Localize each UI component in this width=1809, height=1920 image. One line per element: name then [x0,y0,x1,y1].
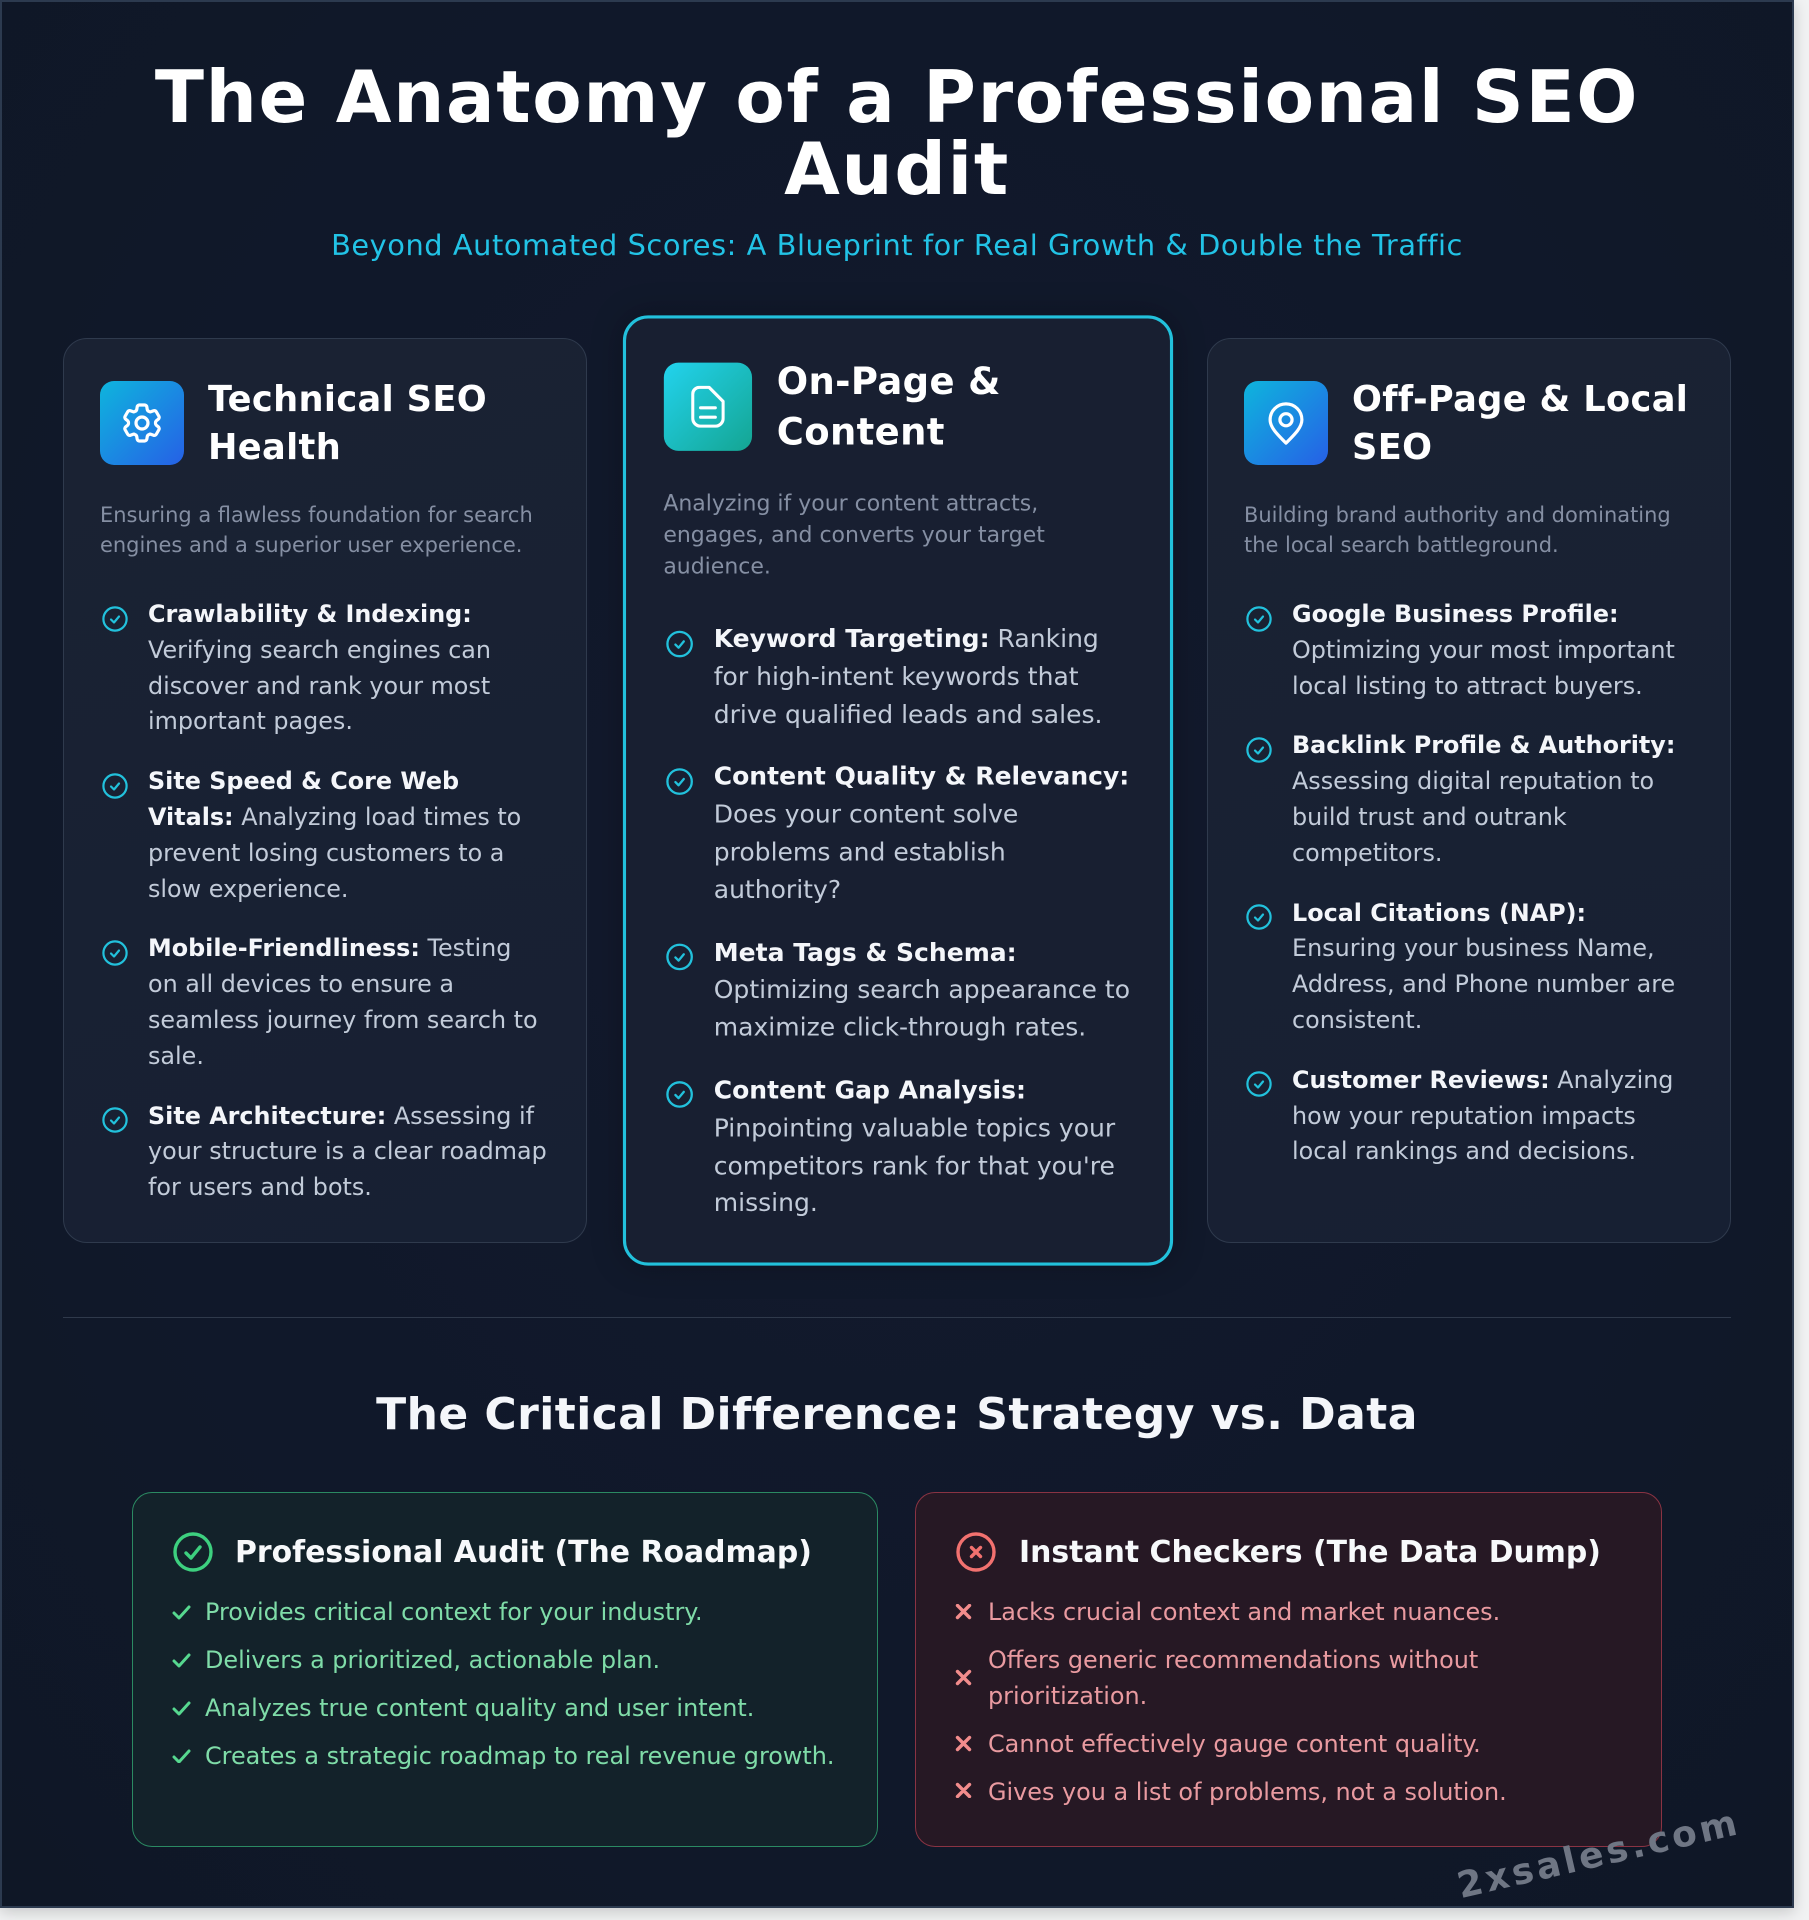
item: backlink profile: Backlink Profile & Authority: [1292,731,1675,759]
card heading: off-page [1244,379,1688,468]
item: mobile friendliness: seamless journey from search to [148,1006,538,1034]
item: site speed [102,767,521,903]
item: meta tags: Optimizing search appearance to [713,975,1130,1005]
item: crawlability [102,600,491,735]
item: crawlability: discover and rank your most [148,672,490,700]
description: Ensuring a flawless foundation for search [100,502,533,526]
item: site architecture [102,1102,547,1201]
description: audience. [663,553,770,578]
item: content gap: competitors rank for that you're [713,1151,1114,1180]
description: engines and a superior user experience. [100,532,522,556]
heading: instant checkers: Instant Checkers (The Data Dump) [1019,1535,1601,1570]
item: local citations: consistent. [1292,1006,1422,1034]
item: customer reviews: local rankings and decisions. [1292,1137,1636,1165]
icon: map pin [1244,381,1328,465]
list item: prioritization. [988,1682,1147,1710]
item: backlink profile [1246,731,1675,867]
item: keyword targeting: Keyword Targeting: Ranking [713,624,1098,653]
item: content quality: Content Quality & Relevancy: [713,762,1129,791]
list item: Creates a strategic roadmap to real revenue growth. [205,1742,834,1770]
icons: check marks [172,1605,191,1763]
item: keyword targeting [666,624,1102,729]
heading: professional audit: Professional Audit (The Roadmap) [235,1535,812,1570]
heading text [208,379,487,468]
item: meta tags: maximize click-through rates. [713,1013,1086,1042]
item: content quality [666,762,1129,904]
item: backlink profile: build trust and outrank [1292,803,1567,831]
item: content gap: Pinpointing valuable topics your [713,1113,1115,1143]
description: Analyzing if your content attracts, [663,490,1038,515]
heading text [1352,379,1688,468]
description: engages, and converts your target [663,522,1044,547]
item: site architecture: Site Architecture: Assessing if [148,1102,534,1130]
item: google business profile [1246,600,1675,700]
watermark: 2xsales.com [1453,1802,1744,1907]
heading text: Content [776,411,944,454]
title [155,55,1639,211]
panel: on-page and content [622,315,1173,1266]
icon: gear [100,381,184,465]
item: content quality: problems and establish [713,837,1005,867]
item: meta tags [666,938,1130,1042]
heading text: On-Page & [776,361,1000,404]
description [663,490,1044,578]
card heading: on-page [664,361,1000,454]
list item: Analyzes true content quality and user intent. [205,1694,754,1722]
icon: red x circle [956,1532,996,1572]
title: Audit [784,127,1010,211]
list item: Delivers a prioritized, actionable plan. [205,1646,660,1674]
item: mobile friendliness: sale. [148,1042,204,1070]
heading text: Health [208,427,341,468]
item: customer reviews: how your reputation impacts [1292,1102,1636,1130]
section heading: The Critical Difference: Strategy vs. Data [376,1389,1418,1440]
icon: document [663,363,751,451]
description [1244,502,1671,556]
item: crawlability: Crawlability & Indexing: [148,600,472,628]
item: content gap: missing. [713,1188,817,1218]
panel: technical SEO health [63,338,587,1243]
item: site speed: prevent losing customers to a [148,839,504,867]
icon: green check circle [173,1532,213,1572]
item: site speed: Site Speed & Core Web [148,767,459,795]
item: crawlability: important pages. [148,707,353,735]
item: content quality: authority? [713,875,841,904]
heading text: SEO [1352,427,1432,468]
item: site speed: slow experience. [148,875,348,903]
item: local citations: Local Citations (NAP): [1292,899,1586,927]
item: customer reviews: Customer Reviews: Analyzing [1292,1066,1673,1094]
item: local citations: Ensuring your business Name, [1292,934,1655,962]
list item: Provides critical context for your industry. [205,1598,703,1626]
card heading: technical SEO [100,379,487,468]
item: site architecture: your structure is a clear roadmap [148,1137,547,1165]
item: site architecture: for users and bots. [148,1173,372,1201]
item: google business profile: Google Business Profile: [1292,600,1619,628]
icons: x marks [956,1604,972,1798]
panel: instant checkers [915,1492,1662,1847]
item: google business profile: Optimizing your most important [1292,636,1675,664]
item: site speed: Vitals: Analyzing load times to [148,803,521,831]
item: meta tags: Meta Tags & Schema: [713,938,1016,967]
panel: off-page and local SEO [1207,338,1731,1243]
item: content quality: Does your content solve [713,800,1018,829]
item: keyword targeting: drive qualified leads and sales. [713,699,1102,729]
description: the local search battleground. [1244,532,1559,556]
list item: Gives you a list of problems, not a solution. [988,1778,1507,1806]
list item: Lacks crucial context and market nuances. [988,1598,1500,1626]
item: mobile friendliness: Mobile-Friendliness: Testing [148,934,511,962]
item: backlink profile: Assessing digital reputation to [1292,767,1654,795]
list item: Offers generic recommendations without [988,1646,1478,1674]
heading text [776,361,1000,454]
item: local citations [1246,899,1675,1034]
title: The Anatomy of a Professional SEO [155,55,1639,139]
list item: Cannot effectively gauge content quality. [988,1730,1481,1758]
item: google business profile: local listing to attract buyers. [1292,672,1643,700]
item: customer reviews [1246,1066,1673,1165]
item: crawlability: Verifying search engines can [148,636,491,664]
item: mobile friendliness [102,934,538,1070]
subtitle: Beyond Automated Scores: A Blueprint for Real Growth & Double the Traffic [331,228,1463,262]
description [100,502,533,556]
heading text: Off-Page & Local [1352,379,1688,420]
item: backlink profile: competitors. [1292,839,1442,867]
description: Building brand authority and dominating [1244,502,1671,526]
item: keyword targeting: for high-intent keywords that [713,662,1078,691]
item: local citations: Address, and Phone number are [1292,970,1675,998]
panel: professional audit [132,1492,878,1847]
item: content gap [666,1076,1116,1218]
item: mobile friendliness: on all devices to ensure a [148,970,454,998]
heading text: Technical SEO [208,379,487,420]
item: content gap: Content Gap Analysis: [713,1076,1026,1105]
